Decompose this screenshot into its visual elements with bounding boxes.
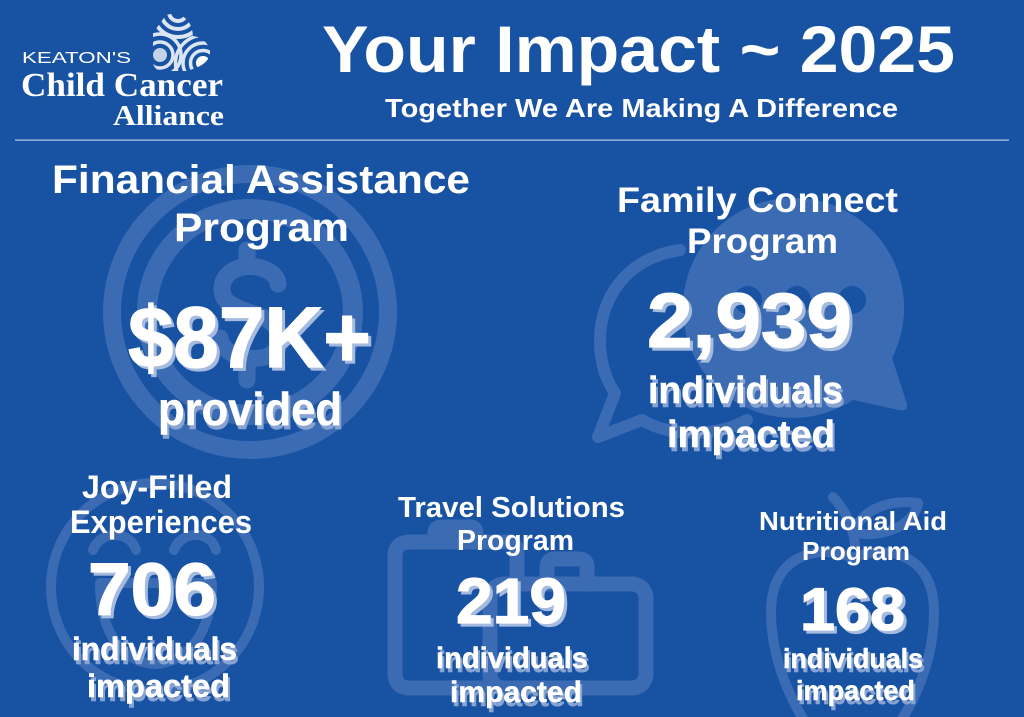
heading: joy-filled experiences: Experiences	[70, 504, 252, 540]
stat label: individuals impacted: individuals	[648, 370, 843, 412]
panel: nutritional aid	[759, 497, 947, 717]
heading: joy-filled experiences: Joy-Filled	[82, 469, 232, 505]
panel: family connect	[598, 181, 907, 456]
stat: 219: 219	[456, 565, 566, 637]
heading: travel solutions program	[398, 492, 625, 557]
stat label: individuals impacted: impacted	[450, 676, 582, 709]
heading: family connect program: Family Connect	[617, 181, 898, 220]
stat label: individuals impacted: individuals	[436, 642, 588, 675]
heading: joy-filled experiences	[70, 469, 252, 540]
stat label: individuals impacted	[648, 370, 843, 456]
stat: 706: 706	[88, 548, 216, 631]
stat label: individuals impacted	[783, 643, 923, 706]
icon: logo heart mark	[153, 14, 210, 71]
heading: nutritional aid program	[759, 506, 947, 566]
heading: travel solutions program: Travel Solutions	[398, 492, 625, 524]
stat label: provided: provided	[158, 383, 342, 435]
heading: financial assistance program	[52, 158, 470, 250]
heading: financial assistance program: Financial Assistance	[52, 158, 470, 202]
title: Your Impact ~ 2025	[322, 12, 955, 86]
stat label: individuals impacted: impacted	[796, 675, 915, 706]
icon: smiley face	[51, 483, 259, 691]
stat label: individuals impacted: individuals	[72, 631, 237, 667]
stat label: individuals impacted	[436, 642, 588, 709]
stat: $87K+: $87K+	[128, 290, 371, 386]
panel: financial assistance	[52, 158, 470, 450]
icon: chat bubbles	[598, 198, 907, 437]
stat label: individuals impacted	[72, 631, 237, 704]
stat label: individuals impacted: impacted	[667, 414, 835, 456]
icon: apple	[771, 497, 934, 717]
stat: 168: 168	[800, 576, 905, 643]
logo: Keaton's Child Cancer Alliance	[22, 14, 224, 126]
heading: nutritional aid program: Program	[802, 536, 910, 566]
logo text: Keaton's: KEATON'S	[22, 50, 131, 67]
heading: family connect program	[617, 181, 898, 261]
heading: nutritional aid program: Nutritional Aid	[759, 506, 947, 536]
icon: suitcases	[395, 527, 646, 688]
heading: financial assistance program: Program	[174, 206, 349, 250]
heading: travel solutions program: Program	[457, 525, 574, 557]
panel: joy-filled experiences	[51, 469, 259, 704]
subtitle: Together We Are Making A Difference	[385, 93, 898, 123]
heading: family connect program: Program	[687, 222, 838, 261]
stat: 2,939: 2,939	[647, 278, 852, 364]
stat label: individuals impacted: impacted	[87, 668, 230, 704]
icon: dollar coin	[112, 174, 388, 450]
panel: travel solutions	[395, 492, 646, 709]
logo text: Child Cancer: Child Cancer	[21, 67, 223, 104]
stat label: individuals impacted: individuals	[783, 643, 923, 674]
logo text: Alliance: Alliance	[113, 100, 224, 132]
